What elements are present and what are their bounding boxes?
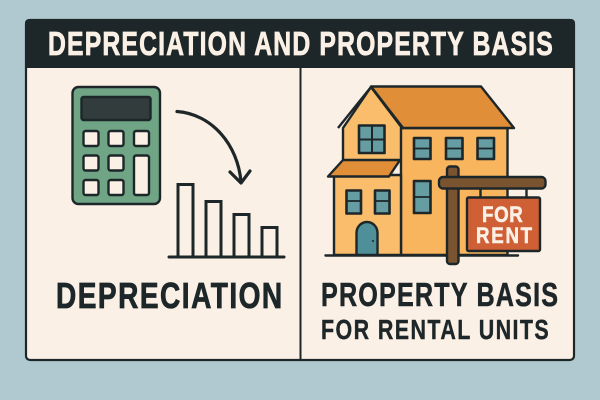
- gable window: [359, 126, 384, 153]
- upper windows: [414, 138, 494, 159]
- arrow: downward curve: [177, 112, 250, 183]
- bar chart: declining value: [169, 184, 284, 257]
- gable wall: [343, 87, 402, 161]
- door: [356, 222, 378, 255]
- label: property basis: PROPERTY BASIS: [321, 277, 558, 314]
- ground: [326, 254, 518, 257]
- label: depreciation: DEPRECIATION: [56, 276, 282, 316]
- awning: [328, 160, 400, 176]
- lower wall: [334, 175, 401, 255]
- title: DEPRECIATION AND PROPERTY BASIS: [48, 27, 553, 63]
- label: for rental units: FOR RENTAL UNITS: [321, 316, 549, 346]
- roof: [371, 86, 514, 128]
- title bar: [25, 19, 575, 68]
- sign text: RENT: [476, 225, 533, 248]
- main wall: [401, 128, 508, 255]
- lower windows: [346, 181, 430, 214]
- sign text: [476, 204, 533, 248]
- icon: rental house: [326, 86, 518, 256]
- panel: card frame: [26, 20, 574, 360]
- icon: calculator: [72, 87, 160, 204]
- icon: for rent sign: [439, 166, 546, 264]
- panel divider: [300, 68, 302, 360]
- sign text: FOR: [482, 204, 523, 227]
